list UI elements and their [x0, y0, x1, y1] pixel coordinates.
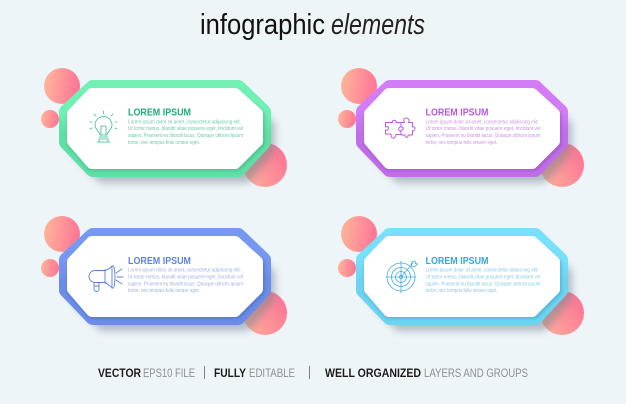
panel: cyan target card: [338, 216, 584, 335]
footer text: WELL ORGANIZED: [325, 366, 421, 380]
text block: sapien. Praesent eu blandit lacus. Quisque ultrices ipsum: [426, 133, 540, 139]
text block: tortor, nec tempus felis ornare eget.: [128, 140, 200, 146]
title: elements: [331, 9, 425, 41]
text block: tortor, nec tempus felis ornare eget.: [128, 288, 200, 294]
text block: Ut tortor metus, blandit vitae posuere eget, tincidunt vel: [426, 274, 540, 280]
text block: Lorem ipsum dolor sit amet, consectetur adipiscing elit.: [426, 268, 538, 274]
heading: LOREM IPSUM: [128, 256, 191, 267]
icon: puzzle: [386, 118, 415, 138]
title: infographic: [200, 9, 325, 41]
text block: Lorem ipsum dolor sit amet, consectetur adipiscing elit.: [426, 120, 538, 126]
text block: sapien. Praesent eu blandit lacus. Quisque ultrices ipsum: [426, 282, 540, 288]
footer text: EPS10 FILE: [143, 366, 195, 380]
text block: sapien. Praesent eu blandit lacus. Quisque ultrices ipsum: [128, 282, 243, 288]
text block: tortor, nec tempus felis ornare eget.: [426, 288, 498, 294]
text block: Ut tortor metus, blandit vitae posuere eget, tincidunt vel: [128, 274, 243, 280]
heading: LOREM IPSUM: [426, 256, 488, 267]
title: [200, 9, 425, 41]
text block: Lorem ipsum dolor sit amet, consectetur adipiscing elit.: [128, 120, 241, 126]
footer text: [98, 366, 528, 380]
panel: blue megaphone card: [41, 216, 287, 335]
text block: [128, 268, 243, 294]
icon: megaphone: [89, 266, 123, 292]
footer text: EDITABLE: [249, 366, 295, 380]
panel: purple puzzle card: [338, 68, 584, 187]
text block: [426, 268, 540, 294]
heading: LOREM IPSUM: [426, 108, 488, 118]
icon: lightbulb: [90, 111, 117, 142]
text block: Ut tortor metus, blandit vitae posuere eget, tincidunt vel: [426, 126, 540, 132]
footer text: LAYERS AND GROUPS: [424, 366, 528, 380]
footer text: FULLY: [214, 366, 246, 380]
heading: LOREM IPSUM: [128, 108, 191, 118]
icon: target: [386, 261, 418, 293]
text block: [128, 120, 243, 146]
panel: green lightbulb card: [41, 68, 287, 187]
footer text: VECTOR: [98, 366, 141, 380]
text block: Ut tortor metus, blandit vitae posuere eget, tincidunt vel: [128, 126, 243, 132]
text block: Lorem ipsum dolor sit amet, consectetur adipiscing elit.: [128, 268, 241, 274]
text block: sapien. Praesent eu blandit lacus. Quisque ultrices ipsum: [128, 133, 243, 139]
text block: tortor, nec tempus felis ornare eget.: [426, 140, 498, 146]
text block: [426, 120, 540, 146]
